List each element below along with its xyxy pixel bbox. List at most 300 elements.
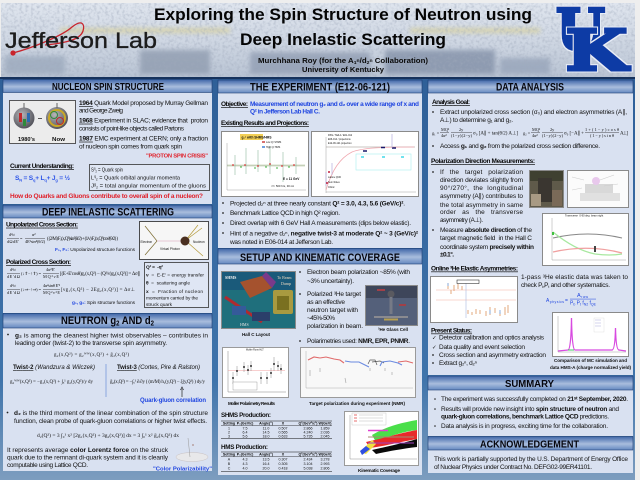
table: HMS production: 3.278 [320,458,330,462]
table: SHMS production: 0.633 [278,434,288,438]
text block: setup bullets: neutron target with [307,307,358,314]
text block: acknowledgement: This work is partially supported by the U.S. Department of Energy Office [434,456,628,463]
table: SHMS production: 0.565 [278,430,288,434]
text block: analysis goal: g₂ = [523,130,531,136]
panel: nucleon spin structure [3,80,212,204]
table: SHMS production: 2.036 [320,430,330,434]
text block: twist-3 [110,365,206,385]
table: SHMS production: 4.240 [304,430,312,434]
table: HMS production: 0.418 [278,466,288,470]
author and affiliation: n [357,58,360,63]
table: HMS production: 2.806 [320,466,330,470]
text block: polarized cross section: g₁, g₂: Spin structure functions [72,300,136,306]
logo: UK [556,0,631,84]
text block: setup bullets: as an effective [307,299,345,306]
caption: kinematic coverage: Kinematic Coverage [358,468,400,474]
author and affiliation: /d [360,58,367,65]
author and affiliation: Collaboration) [373,58,428,65]
subheading: existing results: Existing Results and Projections: [221,120,309,127]
heading: setup and kinematic coverage [218,248,422,264]
text block: summary bullets: The experiment was successfully completed on 21ˢᵗ September, 2020. [441,396,628,403]
captions: polarization charts [228,401,405,406]
text block: polarization direction: If the target polarization [440,169,523,176]
chart: target polarization NMR [300,348,416,398]
heading: neutron g2 and d2: NEUTRON g [61,315,125,327]
text block: analysis goal: 1+(1−y)cosθ [585,127,619,132]
text: current understanding: q [33,178,36,182]
text block: polarization direction: 90°/270°, the longitudinal [440,184,524,192]
table: SHMS production: 5.6 [242,434,248,438]
text block: twist-2: g₂ᵂᵂ(x,Q²) = −g₁(x,Q²) + ∫ₓ¹ g₁(y,Q²)/y dy [10,379,94,385]
text: current understanding: g [55,178,58,182]
table: HMS production: 16.4 [262,462,270,466]
text block: elastic data: 1-pass ³He elastic data was taken to [521,274,628,281]
table: HMS production: A [228,458,231,462]
text block: analysis goal: A⊥) to determine g₁ and g₂. [440,117,513,124]
table: SHMS production: P₀(GeV/c) [237,422,254,426]
icon: color polarizability force diagram [176,438,208,462]
table: SHMS production: 1 [228,426,230,430]
legend box: spin terms: z [96,178,98,182]
legend box: variables: struck quark [146,302,173,308]
table: HMS production: X [282,452,285,456]
legend box: spin terms: J [91,184,94,190]
formula: physics asymmetry: A [546,298,549,304]
chart: d2n vs Q2: Sum Rules [328,181,340,184]
formula: physics asymmetry: t [580,302,581,306]
legend box: variables: x = Fraction of nucleon [146,289,203,295]
text block: setup bullets: Polarimetries used: NMR, EPR, PNMR. [307,338,410,345]
table: HMS production: 20.0 [262,466,270,470]
table: SHMS production [221,412,332,438]
text block: analysis goal: σ₀ [A∥ + tan(θ/2) A⊥] [473,130,518,136]
text block: analysis goal: 2y [550,127,555,132]
caption: 3He glass cell: ³He Glass Cell [378,327,408,332]
table: HMS production: C [228,466,231,470]
chart: d2n projections vs x: High Q² HMS [266,146,281,149]
image: target photo [530,170,564,208]
table: SHMS production: X [282,422,285,426]
text block: unpolarized cross section: d²σ [9,232,15,237]
text block: analysis goal: Extract unpolarized cross section (σ₀) and electron asymmetries (A∥, [440,108,627,116]
text block: twist-2 [10,365,95,385]
text block: polarized cross section: dE'dΩ [7,274,20,279]
table: HMS production: W(GeV) [319,452,332,456]
table: SHMS production: 2.045 [320,434,330,438]
text block: polarization direction: the total asymmetry in same [440,202,523,209]
text block: objective: Measurement of neutron g₂ and d₂ over a wide range of x and [250,101,419,108]
text block: polarization direction: Polarization Direction Measurements: [431,158,535,165]
table: HMS production: P₀(GeV/c) [237,452,254,456]
text block: experiment bullets: Benchmark Lattice QCD in high Q² region. [230,210,340,217]
text block: elastic data [521,274,628,289]
table: HMS production: 4.0 [242,466,248,470]
chart: kinematic coverage [344,412,418,466]
text block: polarized cross section: (↓⇑−↑⇑) = [21,271,42,276]
table: HMS production: 0.305 [278,462,288,466]
text block: present status: Data quality and event selection [439,344,525,351]
text block: history: consists of point-like objects called Partons [79,126,185,133]
text block: polarization direction [431,158,535,258]
text block: analysis goal: (1−y)(2−y) [542,133,564,138]
author and affiliation [258,58,428,74]
text block: polarized cross section [6,259,140,306]
text block: polarization direction: ±0.1°. [440,250,454,258]
table: SHMS production: 2 [228,430,230,434]
text: current understanding: q [44,178,47,182]
legend box: spin terms: q [94,174,96,178]
captions: polarization charts: Moller Polarimetry Results [228,401,275,406]
table: HMS production: Angle(°) [259,452,274,456]
text block: unpolarized cross section: dΩdE' [7,239,19,244]
diagram: scattering Feynman: Electron [140,240,152,244]
heading: nucleon spin structure: NUCLEON SPIN STRUCTURE [52,82,164,93]
chart: d2n vs Q2: RSS / Hall A / E01-012 [328,134,353,137]
heading: the experiment: THE EXPERIMENT (E12-06-121) [250,82,390,94]
chart: Moller polarimetry [222,348,288,398]
image: proton 1980's vs now [10,100,76,144]
chart: d2n vs Q2: Chiral [328,186,335,189]
chart: target polarization direction: Transverse 0-90 deg beam right [565,214,604,218]
panel: summary [428,376,633,436]
chart: target polarization direction [542,214,628,266]
text block: analysis goal: σ₀ [−A∥ + [564,130,584,136]
author and affiliation: n [369,58,373,63]
text block: polarized cross section: [νg₁(x,Q²) − 2Eg₂(x,Q²)] = Δσ⊥ [61,287,135,293]
table: SHMS production: SHMS Production: [221,412,271,419]
text block: polarization direction: direction deviates slightly from [440,177,523,184]
text block: setup bullets [299,269,410,345]
text block: present status [431,328,546,367]
chart: d2n vs Q2 [312,132,418,196]
text block: present status: Cross section and asymmetry extraction [439,352,546,359]
heading: neutron g2 and d2: 2 [116,320,120,328]
text: current understanding: + L [35,175,45,182]
text: current understanding [10,163,74,182]
caption: MC comparison [550,358,631,370]
chart: d2n projections vs x: <I> 500 hrs, 30 nA [271,184,294,188]
text block: experiment bullets: was noted in E06-014 at Jefferson Lab. [229,239,333,246]
panel: data analysis [428,80,633,375]
legend box: spin terms: = total angular momentum of the gluons [98,184,206,190]
legend box: spin terms: z [95,170,97,174]
chart: Moller polarimetry: Moller Runs HLT [246,348,264,352]
text block: polarized cross section: dE'dΩ [7,290,20,295]
panel: setup and kinematic coverage [218,248,422,475]
text: current understanding: = ½ [58,174,70,182]
diagram: scattering Feynman: Nucleon [193,240,205,244]
text block: g2 description: leading order (twist-2) to the transverse spin asymmetry. [15,340,167,347]
formula: physics asymmetry [546,293,597,306]
text block: analysis goal: (1−y)sinθ [590,133,614,138]
subheading: online elastic asymmetries: Online ³He Elastic Asymmetries: [431,266,518,272]
text block: analysis goal: 2y [459,127,464,132]
chart: d2n projections vs x: E = 11 GeV [283,177,300,181]
text block: present status: Extract g₂ⁿ, d₂ⁿ [439,360,478,367]
text block: present status: ✓ [432,345,437,351]
caption: Hall C layout: Hall C Layout [242,332,270,337]
text block: acknowledgement [434,456,628,471]
text block: analysis goal: 4α² [441,133,447,138]
legend box: variables: Q² = -q² [146,264,163,270]
text block: d2 description [7,410,208,469]
table: SHMS production: 0.507 [278,426,288,430]
text block: polarized cross section: d²σ [10,283,16,288]
text block: objective: Q² in Jefferson Lab Hall C. [250,108,320,116]
text block: setup bullets: polarization in beam. [307,323,363,330]
formula: physics asymmetry: physics [550,300,564,304]
title [154,6,532,49]
text block: polarized cross section: 4α²sinθ E'² [43,283,61,288]
text block: analysis goal: MQ² [441,127,450,132]
text block: polarization direction: asymmetry (A∥) contributes to [440,192,523,200]
text block: history: and George Zweig [79,108,123,114]
legend box: spin terms [90,164,210,190]
text block: polarized cross section: MQ²ν²E [43,290,60,295]
text block: setup bullets: Polarized ³He target [307,291,361,298]
legend box: spin terms: S [91,168,95,174]
question: How do Quarks and Gluons contribute to overall spin of a nucleon? [10,193,203,200]
logo: Jefferson Lab [5,23,157,56]
text block: setup bullets: Electron beam polarization ~85% (with [307,269,410,276]
heading: data analysis [428,80,633,94]
formula: physics asymmetry: QE [591,302,597,306]
heading: nucleon spin structure [3,80,212,93]
text block: polarization direction: target magnetic field in the Hall C [440,235,532,242]
text block: unpolarized cross section: ( (2/M) F₁(x,Q²)sin²(θ/2) + (1/ν) F₂(x,Q²)cos²(θ/2) ) [47,236,118,242]
text block: experiment bullets: Direct overlap with 6 GeV Hall A measurements (dips below elastic). [230,220,411,227]
image: Hall C layout: To Beam [277,275,292,280]
heading: data analysis: DATA ANALYSIS [496,82,564,94]
text block: d2 description: It represents average color Lorentz force on the struck [7,447,169,454]
table: HMS production [221,444,332,472]
chart: elastic asymmetries [430,276,518,322]
text block: experiment bullets: Projected d₂ⁿ at three nearly constant Q² = 3.0, 4.3, 5.6 (GeV/c)². [230,201,405,208]
text block: elastic data: and other systematics. [549,282,610,289]
image: target field diagram [568,170,628,208]
panel: acknowledgement [428,436,633,473]
image: Hall C layout: Dump [281,281,291,286]
text block: history: of nucleon spin comes from quark spin [79,143,182,150]
text block: polarization direction: order as the transverse [440,209,523,216]
table: SHMS production: 1.859 [320,426,330,430]
text block: summary bullets: Results will provide new insight into spin structure of neutron and [441,406,619,413]
table: HMS production: B [228,462,231,466]
table: SHMS production: 11.0 [263,426,269,430]
legend box: variables: momentum carried by the [146,296,198,302]
caption: MC comparison: Comparison of MC simulation and [554,358,627,363]
text block: analysis goal: Analysis Goal: [432,99,470,106]
header banner [0,0,635,84]
text block: polarized cross section: MQ²νE [43,274,59,279]
text block: g2 description [7,333,208,358]
text: current understanding: + J [47,175,56,182]
label: quark-gluon correlation: Quark-gluon correlation [140,398,206,404]
text block: elastic data: P [544,282,549,289]
formula: physics asymmetry: raw [581,295,588,299]
text block: analysis goal: 4α² [532,133,538,138]
text block: polarization direction: coordinate system precisely within [440,244,534,251]
text block: analysis goal: (1−y)(2−y) [451,133,473,138]
table: SHMS production: 5.735 [304,434,312,438]
chart: d2n projections vs x: g₂ⁿ with SHMS/HMS [242,136,271,140]
formula: physics asymmetry: f [588,300,592,306]
text block: analysis goal [432,99,628,150]
text: current understanding: S [15,175,19,182]
logo: Jefferson Lab: Jefferson Lab [5,28,157,53]
logo: UK: K [565,18,631,84]
heading: deep inelastic scattering: DEEP INELASTIC SCATTERING [42,206,174,218]
table: HMS production: 2.993 [320,462,330,466]
arrow: quark-gluon correlation [180,387,184,397]
image: Hall C layout: SHMS [225,275,237,280]
text block: twist-3: Twist-3 (Cortes, Pire & Ralston) [117,365,200,371]
legend box: variables: ν = E-E' = energy transfer [146,272,204,278]
table: SHMS production: 14.5 [262,430,270,434]
diagram: scattering Feynman [140,222,208,260]
text block: twist-3: ḡ₂(x,Q²) = −∫ₓ¹ ∂/∂y ( (m/M) h₁(y,Q²) − ξ(y,Q²) ) dy/y [110,379,206,385]
legend box: spin terms: = Quark spin [97,168,123,174]
text block: unpolarized cross section: 4E²sin⁴(θ/2) [25,239,46,244]
text block: history: 1987 EMC experiment at CERN; only a fraction [79,136,208,143]
text block: polarized cross section: (↓⇒−↑⇒) = [21,287,42,292]
text block: d2 description: computable using Lattice QCD. [7,462,88,469]
table: HMS production: HMS Production: [221,444,268,451]
text block: elastic data: check P [521,282,542,289]
legend box: spin terms: q [94,166,95,170]
heading: neutron g2 and d2: AND d [119,315,151,327]
heading: setup and kinematic coverage: SETUP AND KINEMATIC COVERAGE [240,252,400,264]
text block: twist-2: Twist-2 (Wandzura & Wilczek) [13,365,95,371]
formula: physics asymmetry: = [565,298,568,304]
chart: d2n vs Q2: Lattice QCD [328,176,341,179]
chart: d2n vs Q2: E12-06-121 projection [328,142,352,145]
table: HMS production: Q²(GeV²/c²) [299,452,318,456]
heading: summary [428,376,633,390]
chart: MC comparison [552,312,628,356]
table: SHMS production: 7.5 [242,426,248,430]
text block: polarized cross section: Polarized Cross Section: [6,259,71,266]
table: SHMS production: 18.0 [262,434,270,438]
text block: polarization direction: asymmetry (A⊥). [440,217,483,224]
image: Hall C layout [222,272,296,328]
text block: experiment bullets [222,201,419,246]
text block: analysis goal: Access g₁ and g₂ from the polarized cross section difference. [440,143,600,150]
title: Exploring the Spin Structure of Neutron using [154,6,532,24]
table: HMS production: 0.307 [278,458,288,462]
text block: history: 1968 Experiment in SLAC; evidence that proton [79,118,208,125]
legend box: variables: θ = scattering angle [146,280,190,286]
text block: polarized cross section: [(E+E'cosθ)g₁(x,Q²) − (Q²/ν)g₂(x,Q²)] = Δσ∥ [60,271,140,277]
text block: d2 description: function, clean probe of quark-gluon correlations or higher twist effects. [14,418,207,425]
image: Hall C layout: HMS [240,322,249,327]
heading: summary: SUMMARY [505,379,554,390]
text block: analysis goal: g₁ = [432,130,440,136]
text block: unpolarized cross section: = [20,236,23,241]
text block: experiment bullets: Hint of a negative d₂ⁿ, negative twist-3 at moderate Q² ~ 3 (GeV/c)² [230,231,419,238]
label: color polarizability: "Color Polarizability" [153,466,212,472]
formula: physics asymmetry: A [577,293,581,299]
panel: deep inelastic scattering [3,205,212,313]
captions: polarization charts: Target polarization during experiment (NMR) [309,401,405,406]
table: SHMS production: 6.4 [242,430,248,434]
table: SHMS production: Angle(°) [259,422,274,426]
author and affiliation: 1 [354,60,357,65]
text: current understanding: N [19,178,22,182]
text block: polarization direction: Measure absolute direction of the [440,227,532,234]
table: HMS production: 13.5 [262,458,270,462]
legend box: spin terms: = Quark orbital angular momenta [98,176,181,182]
text block: unpolarized cross section: Unpolarized Cross Section: [6,222,78,229]
text block: summary bullets [434,396,628,430]
text block: polarized cross section: d²σ [10,267,16,272]
text block: unpolarized cross section [6,222,136,253]
text block: objective: Objective: [221,101,248,108]
text block: elastic data: t [548,284,550,289]
text block: unpolarized cross section: F₁, F₂: Unpolarized structure functions [55,247,136,253]
legend box: spin terms: g [94,182,96,186]
text block: g2 description: g₂ is among the cleanest higher twist observables – contributes in [15,333,208,340]
text block: d2 description: d₂ is the third moment of the linear combination of the spin structure [14,410,208,417]
chart: d2n projections vs x [222,132,308,196]
chart: d2n projections vs x: Low Q² SHMS [266,141,282,144]
formula: physics asymmetry: N2 [584,302,588,306]
text block: history [79,100,208,160]
table: HMS production: Setting [223,452,235,456]
text block: summary bullets: Data analysis is in progress, exciting time for the collaboration. [441,423,608,430]
text block: setup bullets: ~45%-50% [307,315,335,322]
table: SHMS production: Q²(GeV²/c²) [299,422,318,426]
heading: acknowledgement: ACKNOWLEDGEMENT [480,438,580,450]
text block: polarized cross section: 4α²E' [46,267,55,272]
text block: analysis goal: MQ² [532,127,541,132]
text block: history: 1964 Quark Model proposed by Murray Gellman [79,100,208,107]
author and affiliation: 2 [367,60,370,65]
heading: acknowledgement [428,436,633,450]
diagram: scattering Feynman: Virtual Photon [160,247,180,251]
legend box: spin terms: z [96,186,98,190]
text block: present status: Detector calibration and optics analysis [439,334,545,342]
text block: elastic data: b [542,284,545,289]
panel: the experiment [218,80,422,248]
heading: neutron g2 and d2: 2 [151,320,154,328]
formula: physics asymmetry: b [573,302,575,306]
title: Deep Inelastic Scattering [240,31,446,49]
formula: physics asymmetry: f [581,300,584,306]
text block: analysis goal: A⊥] [620,130,628,136]
text block: present status: ✓ [432,336,437,342]
table: SHMS production: 2.866 [304,426,312,430]
text block: unpolarized cross section: α² [32,232,36,237]
text block: d2 description: quark due to the remnant di-quark system and it is cleanly [7,454,169,462]
text: current understanding: = S [22,175,34,182]
text: current understanding: Current Understanding: [10,163,74,170]
table: HMS production: 2.434 [304,458,312,462]
table: HMS production: 5.038 [304,466,312,470]
text block: d2 description: d₂(Q²) = 3 ∫₀¹ x² [2g₁(x,Q²) + 3g₂(x,Q²)] dx = 3 ∫₀¹ x² ḡ₂(x,Q²) dx [37,432,179,439]
text block: objective [221,101,419,116]
text block: summary bullets: quark-gluon correlations, benchmark Lattice QCD predictions. [441,414,609,420]
author and affiliation: University of Kentucky [302,67,384,74]
image: 3He glass cell [366,286,418,326]
table: HMS production: 3.104 [304,462,312,466]
table: SHMS production: Setting [223,422,235,426]
image: proton 1980's vs now: 1980's [18,137,35,143]
text block: setup bullets: ~3% uncertainty). [307,278,354,285]
heading: neutron g2 and d2 [3,314,212,328]
text block: g2 description: g₂(x,Q²) = g₂ᵂᵂ(x,Q²) + ḡ₂(x,Q²) [54,352,129,358]
panel: neutron g2 and d2 [3,314,212,472]
